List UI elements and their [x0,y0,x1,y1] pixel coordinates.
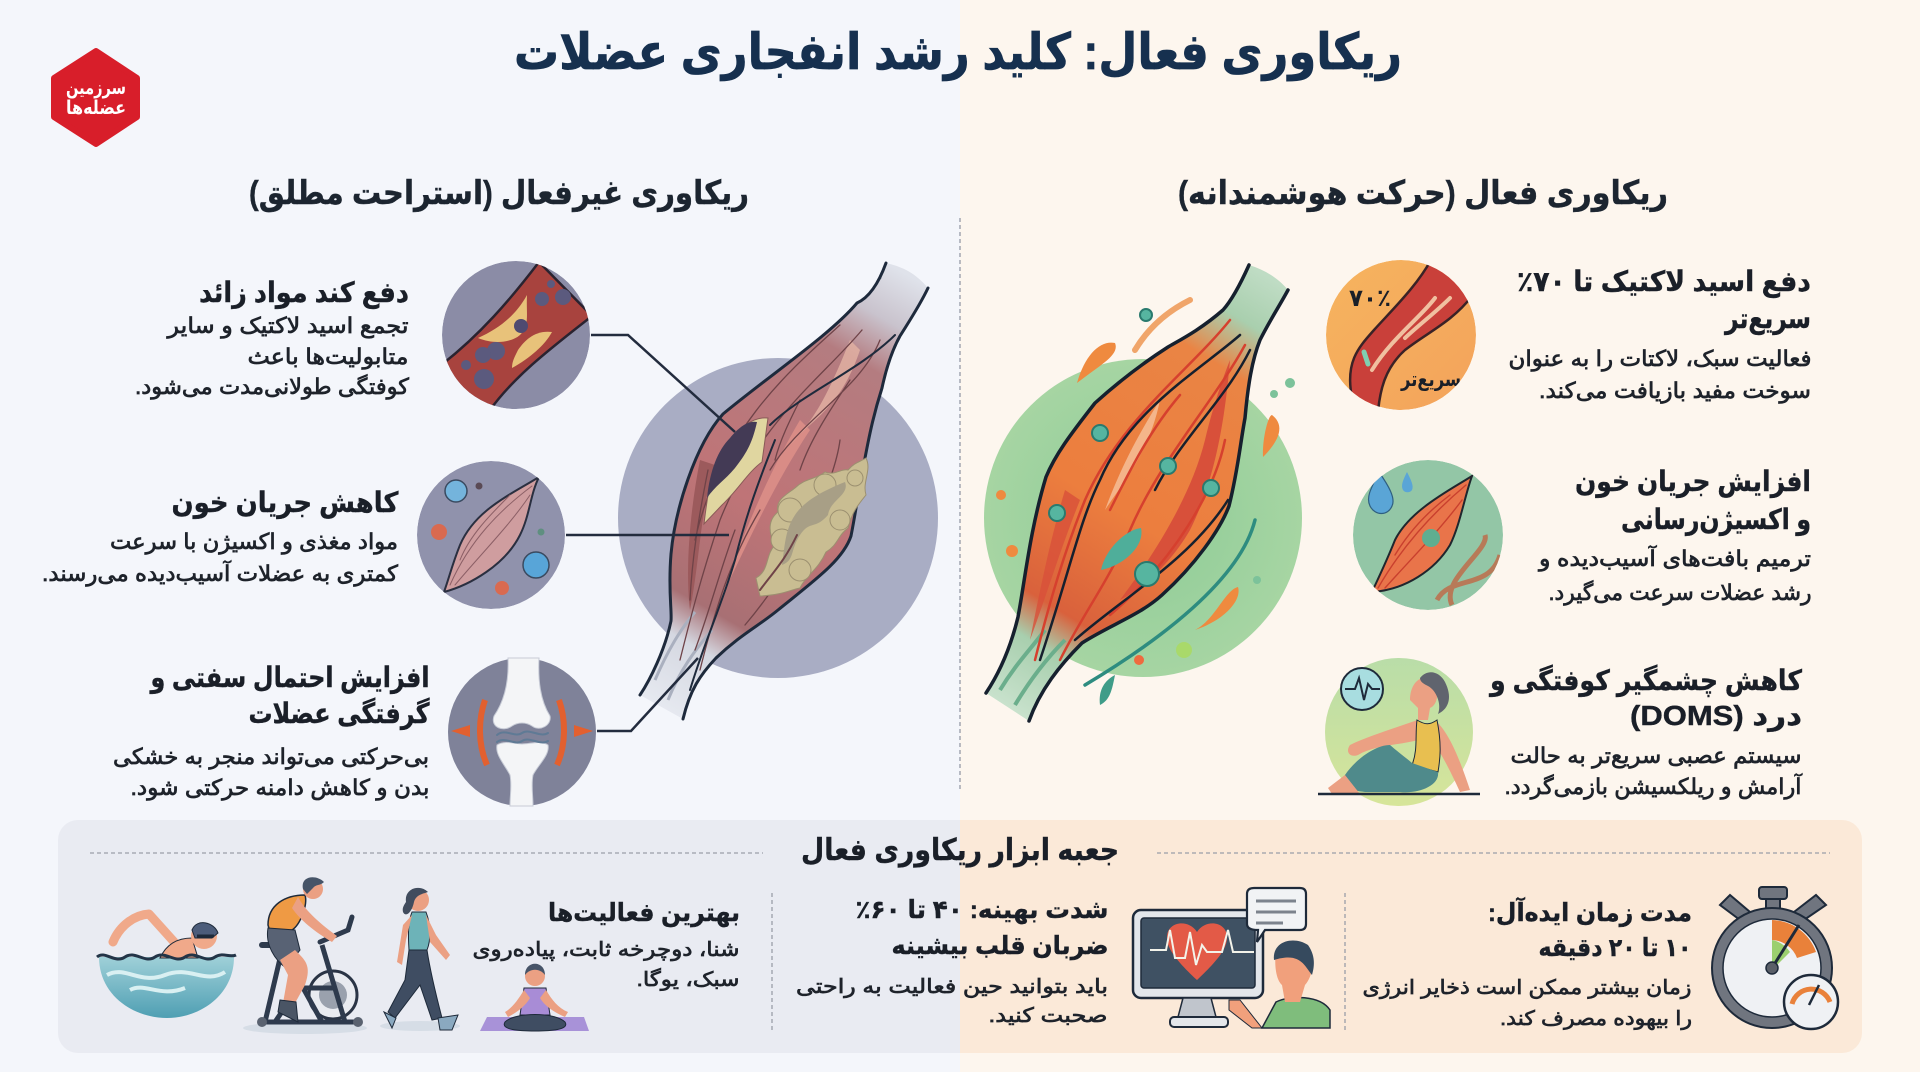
text: lactic body: سوخت مفید بازیافت می‌کند. [1539,378,1811,403]
panel: active recovery [984,174,1812,806]
icon: knee joint [448,658,596,806]
text: blood flow body [42,529,399,586]
block: intensity: ضربان قلب بیشینه [892,932,1108,961]
text: waste removal body [135,313,410,399]
item: increased blood flow: و اکسیژن‌رسانی [1621,504,1811,536]
icon: vessel with 70 percent [1326,258,1476,412]
heading: passive recovery: ریکاوری غیرفعال (استراحت مطلق) [249,174,749,213]
block: duration: ۱۰ تا ۲۰ دقیقه [1538,934,1692,962]
text: blood flow body: مواد مغذی و اکسیژن با سرعت [110,529,398,554]
icon: heart-rate monitor and person [1133,888,1330,1028]
icon: yoga pose [480,964,589,1031]
text: blood flow body: ترمیم بافت‌های آسیب‌دیده و [1538,545,1811,572]
leader lines [566,335,735,731]
text: lactic heading: دفع اسید لاکتیک تا ۷۰٪ [1517,266,1811,298]
item: reduced blood flow [42,461,565,609]
title: ریکاوری فعال: کلید رشد انفجاری عضلات [514,24,1402,82]
item: reduced soreness: درد (DOMS) [1630,700,1802,732]
text: duration heading: مدت زمان ایده‌آل: [1488,897,1692,927]
text: duration body: زمان بیشتر ممکن است ذخایر انرژی [1362,977,1692,999]
icon: muscle with oxygen and DNA [1353,460,1503,610]
item: waste removal [135,261,592,415]
text: blood flow heading: کاهش جریان خون [172,487,399,519]
text: duration body: را بیهوده مصرف کند. [1500,1008,1692,1030]
text: stiffness heading: افزایش احتمال سفتی و [149,662,430,694]
icon: walking woman [380,888,460,1031]
icon: cyclist [243,877,367,1034]
heading: active recovery: ریکاوری فعال (حرکت هوشمندانه) [1178,174,1668,213]
block: best activities [97,877,740,1034]
logo badge: عضله‌ها [66,98,126,119]
text: activities body [472,939,740,991]
text: waste removal heading: دفع کند مواد زائد [199,277,409,309]
text: lactic body: فعالیت سبک، لاکتات را به عنوان [1508,346,1812,371]
icon: vessel with 70 percent: ۷۰٪ [1349,285,1391,312]
icon: muscle with blood cells [417,461,565,609]
text: stiffness body [113,744,430,801]
text: soreness body: آرامش و ریلکسیشن بازمی‌گردد. [1504,773,1802,800]
text: intensity body [796,976,1108,1027]
item: lactic acid clearance: سریع‌تر [1723,303,1811,335]
text: soreness body: سیستم عصبی سریع‌تر به حالت [1510,743,1802,769]
text: activities body: شنا، دوچرخه ثابت، پیاده‌روی [472,939,740,962]
text: duration body [1362,977,1692,1030]
text: activities body: سبک، یوگا. [636,968,740,991]
text: intensity heading: شدت بهینه: ۴۰ تا ۶۰٪ [855,896,1108,925]
icon: clogged vessel [440,261,592,415]
text: blood flow body: رشد عضلات سرعت می‌گیرد. [1548,580,1812,605]
item: stiffness and cramps [149,658,596,806]
icon: swimmer [97,914,236,1018]
icon: relaxed woman with pulse [1318,658,1480,806]
text: soreness heading: کاهش چشمگیر کوفتگی و [1488,664,1803,697]
item: reduced soreness [1318,658,1803,806]
logo badge: سرزمین [66,78,126,99]
icon: vessel with 70 percent: سریع‌تر [1400,369,1461,391]
block: duration [1362,887,1838,1030]
text: stiffness body: بی‌حرکتی می‌تواند منجر به خشکی [113,744,429,769]
text: stiffness body: بدن و کاهش دامنه حرکتی شود. [130,775,430,801]
block: intensity [796,888,1330,1028]
text: activities heading: بهترین فعالیت‌ها [548,899,740,928]
item: stiffness and cramps: گرفتگی عضلات [248,697,430,730]
illustration: healthy muscle [984,265,1302,721]
item: lactic acid clearance [1326,258,1811,412]
illustration: damaged muscle [618,263,938,719]
text: intensity body: باید بتوانید حین فعالیت به راحتی [796,976,1108,998]
panel: passive recovery [42,174,938,806]
text: blood flow heading: افزایش جریان خون [1575,466,1811,498]
text: waste removal body: متابولیت‌ها باعث [248,344,408,369]
text: intensity body: صحبت کنید. [988,1005,1108,1027]
fatty mass [756,458,868,596]
logo badge [54,51,137,144]
text: blood flow body [1538,545,1812,605]
panel: active recovery toolbox [58,820,1862,1053]
text: waste removal body: کوفتگی طولانی‌مدت می‌شود. [135,374,410,399]
heading: toolbox: جعبه ابزار ریکاوری فعال [801,834,1119,868]
item: increased blood flow [1353,460,1811,610]
icon: stopwatch [1712,887,1838,1029]
text: blood flow body: کمتری به عضلات آسیب‌دیده می‌رسند. [42,560,399,586]
text: lactic body [1508,346,1812,403]
text: waste removal body: تجمع اسید لاکتیک و سایر [166,313,408,338]
text: soreness body [1504,743,1802,800]
dark wound [704,418,768,524]
